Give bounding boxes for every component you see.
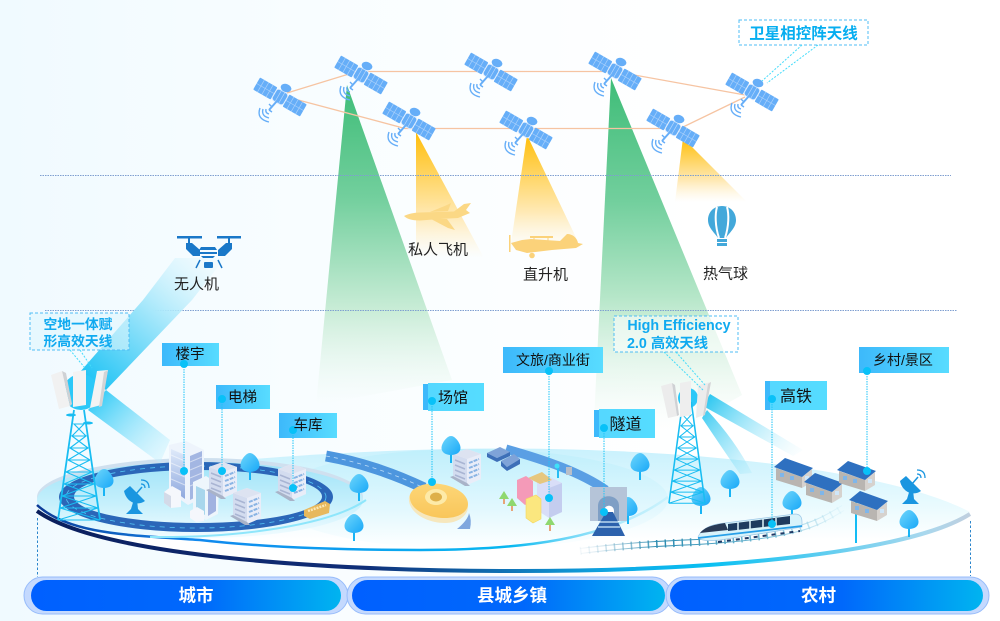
label: stadium: 场馆 <box>438 390 468 406</box>
high speed train <box>698 514 802 542</box>
label: building: 楼宇 <box>176 346 204 363</box>
callout: satellite phased array antenna <box>739 20 868 83</box>
icon: city satellite dish <box>124 480 149 514</box>
callout: integrated beamforming antenna: 形高效天线 <box>44 333 113 349</box>
icon: hot air balloon <box>708 206 736 246</box>
platform: county disc <box>272 449 668 549</box>
satellite constellation <box>253 51 779 155</box>
label: high speed rail: 高铁 <box>780 388 812 406</box>
icon: light plane <box>509 234 583 258</box>
callout: integrated beamforming antenna <box>30 313 129 368</box>
category bar: city <box>24 577 348 614</box>
rural beams <box>702 394 803 474</box>
trees <box>94 436 918 541</box>
railway track <box>580 506 844 554</box>
platform: full disc surface <box>37 449 970 571</box>
callout: high efficiency antenna <box>614 316 738 390</box>
label: high speed rail <box>765 381 827 528</box>
label: tunnel <box>594 409 655 516</box>
label: elevator <box>216 385 270 475</box>
category bar: rural <box>666 577 989 614</box>
label: tourism and commercial street: 文旅/商业街 <box>516 352 590 368</box>
tunnel <box>590 487 627 536</box>
label: village and scenic area: 乡村/景区 <box>873 352 933 368</box>
beam: tower to city <box>88 390 170 463</box>
altitude divider lines <box>40 176 957 310</box>
label: tunnel: 隧道 <box>609 416 642 434</box>
stadium <box>409 484 471 529</box>
city apartment buildings <box>206 462 306 525</box>
label: tourism and commercial street <box>503 347 603 502</box>
city antenna tower <box>51 370 108 520</box>
city towers <box>164 441 219 522</box>
category bar: county and town <box>347 577 671 614</box>
label: stadium <box>423 383 484 486</box>
callout: high efficiency antenna: 2.0 高效天线 <box>627 334 708 352</box>
beam: tower to drone <box>80 258 225 390</box>
callout: satellite phased array antenna: 卫星相控阵天线 <box>749 24 858 42</box>
label: garage: 车库 <box>294 417 322 434</box>
village houses <box>774 458 888 543</box>
city ring road <box>59 462 333 532</box>
satellite beam: green right <box>591 78 742 480</box>
rural antenna tower <box>661 381 711 503</box>
platform edge guide lines <box>38 518 970 577</box>
commercial street buildings <box>517 464 572 523</box>
satellite beam: yellow to plane <box>510 135 582 250</box>
satellite orbit links <box>287 72 745 128</box>
icon: private jet <box>404 203 471 230</box>
icon: drone <box>177 236 241 268</box>
county building <box>450 449 481 486</box>
callout: integrated beamforming antenna: 空地一体赋 <box>44 316 113 332</box>
label: village and scenic area <box>859 347 949 475</box>
platform: city disc <box>37 458 363 538</box>
label: building <box>162 343 219 475</box>
callout: high efficiency antenna: High Efficiency <box>627 318 731 334</box>
small green trees <box>499 491 555 531</box>
satellite beam: yellow to private jet <box>416 132 484 258</box>
label: hot air balloon: 热气球 <box>703 266 748 282</box>
label: elevator: 电梯 <box>228 389 257 406</box>
county flat buildings <box>487 447 520 471</box>
label: private jet: 私人飞机 <box>408 242 468 258</box>
platform: rim lines <box>37 497 970 571</box>
satellite beam: green left <box>316 85 452 405</box>
icon: rural satellite dish <box>900 470 925 504</box>
label: drone: 无人机 <box>174 276 219 293</box>
county roads <box>326 449 606 490</box>
label: light plane: 直升机 <box>523 266 568 284</box>
category bar: county and town: 县城乡镇 <box>477 586 547 606</box>
label: garage <box>279 413 337 492</box>
satellite beam: yellow to balloon <box>675 138 747 202</box>
category bar: rural: 农村 <box>801 586 836 606</box>
icon: school bus <box>304 501 330 519</box>
category bar: city: 城市 <box>178 586 214 606</box>
